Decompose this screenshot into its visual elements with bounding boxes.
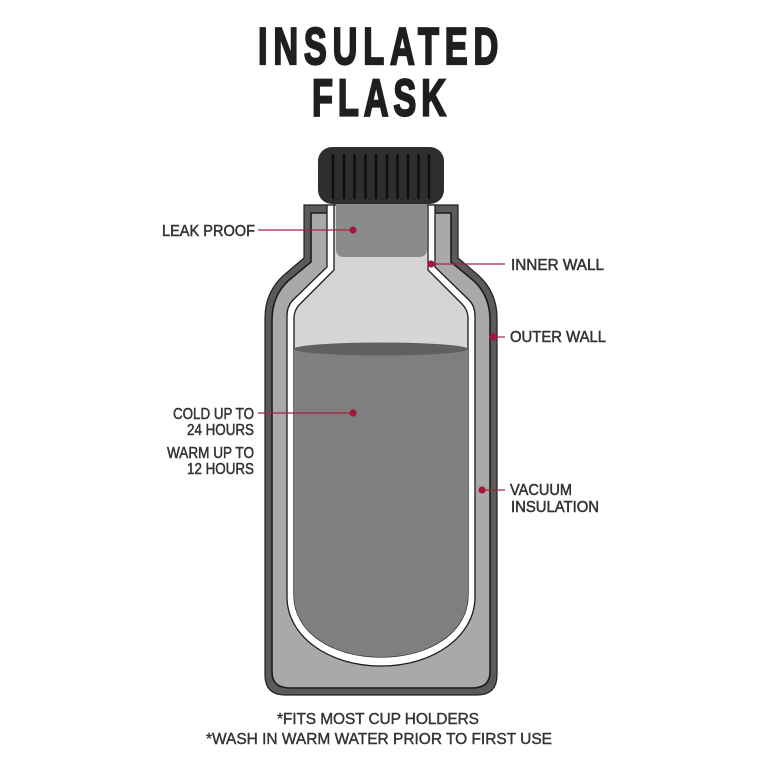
- callout: outer wall: OUTER WALL: [510, 329, 606, 346]
- flask diagram: [265, 147, 497, 695]
- callout: leak proof: LEAK PROOF: [162, 223, 255, 240]
- title: [258, 18, 498, 127]
- outer wall: [265, 205, 497, 695]
- title: INSULATED: [258, 18, 498, 76]
- footnotes: [206, 711, 552, 748]
- callout: temperature retention: WARM UP TO: [167, 445, 254, 462]
- title: FLASK: [312, 69, 446, 127]
- liquid: [290, 342, 472, 661]
- callout: inner wall: INNER WALL: [511, 257, 604, 274]
- callout: vacuum insulation: [478, 482, 599, 516]
- callout: inner wall: [427, 257, 604, 274]
- leak proof plug: [336, 200, 427, 257]
- footnotes: *WASH IN WARM WATER PRIOR TO FIRST USE: [206, 731, 552, 748]
- air space inside flask: [294, 205, 468, 657]
- callout: temperature retention: 24 HOURS: [187, 422, 254, 439]
- vacuum insulation layer: [272, 213, 490, 688]
- footnotes: *FITS MOST CUP HOLDERS: [277, 711, 479, 728]
- callout: vacuum insulation: INSULATION: [511, 499, 599, 516]
- callout: leak proof: [162, 223, 357, 240]
- cap: [318, 147, 444, 204]
- inner wall: [287, 205, 475, 666]
- callout: temperature retention: [167, 406, 357, 478]
- callout: vacuum insulation: VACUUM: [510, 482, 572, 499]
- callout: temperature retention: 12 HOURS: [187, 461, 254, 478]
- callout: temperature retention: COLD UP TO: [173, 406, 254, 423]
